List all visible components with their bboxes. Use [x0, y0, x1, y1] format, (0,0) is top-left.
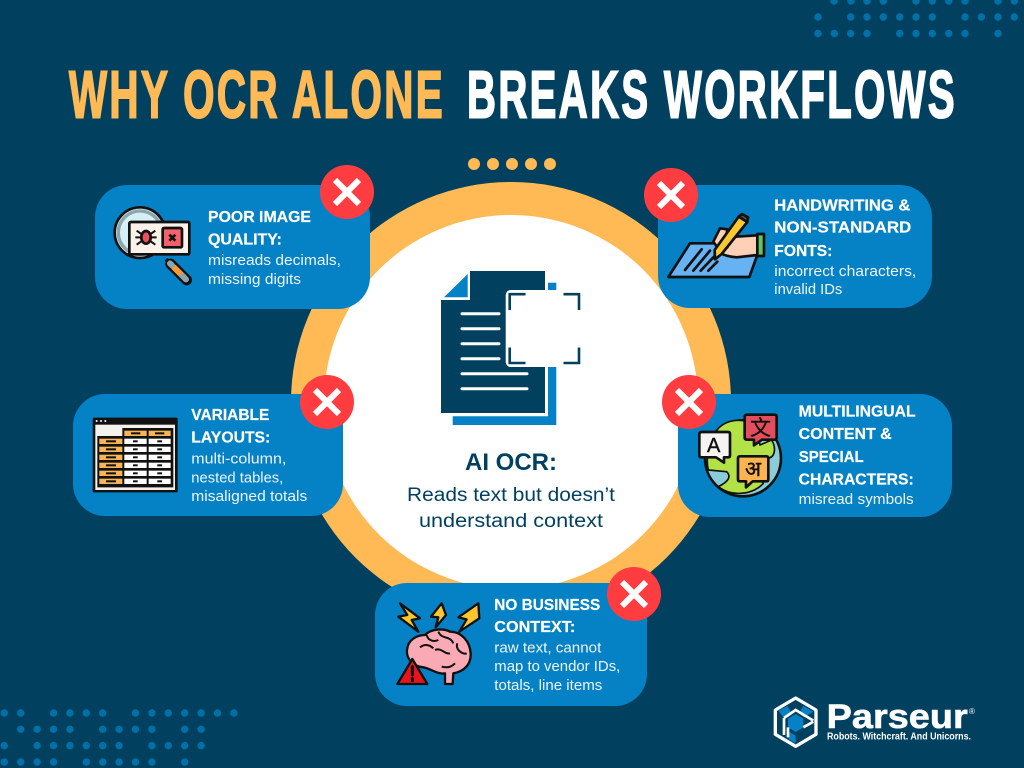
heading: no business context: NO BUSINESS	[494, 597, 600, 614]
heading line 2: QUALITY:	[208, 231, 282, 248]
heading: no business context	[494, 597, 600, 636]
body text: misread symbols	[799, 492, 914, 508]
heading: handwriting: FONTS:	[774, 243, 832, 260]
logo: Parseur	[775, 698, 975, 746]
body text	[191, 451, 307, 505]
central circle	[291, 182, 731, 622]
panel: handwriting and fonts	[658, 185, 932, 308]
body text: raw text, cannot	[494, 640, 601, 656]
center text: AI OCR	[407, 449, 616, 532]
heading: multilingual: MULTILINGUAL	[799, 404, 916, 421]
body text: misreads decimals,	[208, 253, 341, 269]
body text: multi-column,	[191, 451, 286, 467]
wordmark: Parseur	[827, 698, 968, 736]
panel: variable layouts	[73, 394, 343, 516]
icon: document scan	[441, 271, 591, 425]
body text: nested tables,	[191, 470, 283, 486]
bubble glyph: A: A	[707, 435, 721, 457]
center text: AI OCR: AI OCR:	[465, 449, 557, 476]
body text	[774, 264, 916, 298]
tagline: Robots. Witchcraft. And Unicorns.	[827, 732, 971, 742]
panel: multilingual content	[678, 394, 952, 517]
x badge: variable layouts	[300, 375, 354, 429]
heading: multilingual: CHARACTERS:	[799, 471, 914, 488]
center text: AI OCR: Reads text but doesn’t	[407, 485, 616, 506]
body text: incorrect characters,	[774, 264, 916, 280]
icon: magnifying glass	[115, 207, 189, 280]
heading: handwriting: NON-STANDARD	[774, 220, 911, 237]
heading: variable layouts: VARIABLE	[191, 407, 269, 424]
icon: globe with speech bubbles	[699, 415, 781, 496]
bubble glyph: wen: 文	[750, 412, 771, 442]
icon: hand writing	[668, 214, 764, 277]
heading: variable layouts	[191, 407, 270, 447]
heading: no business context: CONTEXT:	[494, 619, 575, 636]
icon: brain with warning	[397, 603, 479, 684]
x badge: poor image quality	[320, 165, 374, 219]
registered mark: ®	[969, 707, 975, 716]
body text: misaligned totals	[191, 489, 307, 505]
heading: multilingual: CONTENT &	[799, 426, 892, 443]
title: WHY OCR ALONE	[69, 58, 445, 132]
x badge: handwriting	[644, 168, 698, 222]
five decorative orange dots	[468, 158, 556, 170]
panel: no business context	[375, 583, 647, 706]
body text: invalid IDs	[774, 282, 842, 298]
heading: multilingual: SPECIAL	[799, 449, 864, 466]
heading: poor image quality: POOR IMAGE	[208, 209, 311, 226]
x badge: multilingual	[662, 375, 716, 429]
heading: handwriting: HANDWRITING &	[774, 198, 910, 215]
bubble glyph: devanagari a: अ	[745, 457, 762, 481]
x badge: no business context	[607, 567, 661, 621]
panel: poor image quality	[95, 185, 370, 309]
heading: variable layouts: LAYOUTS:	[191, 430, 270, 447]
body text: missing digits	[208, 272, 301, 288]
body text	[208, 253, 341, 288]
body text: map to vendor IDs,	[494, 659, 620, 675]
icon: hexagon cube	[775, 698, 816, 746]
icon: table	[93, 418, 178, 492]
center text: AI OCR: understand context	[419, 511, 604, 532]
body text	[494, 640, 620, 694]
heading: handwriting	[774, 198, 911, 260]
heading: multilingual	[799, 404, 916, 488]
body text: totals, line items	[494, 678, 602, 694]
